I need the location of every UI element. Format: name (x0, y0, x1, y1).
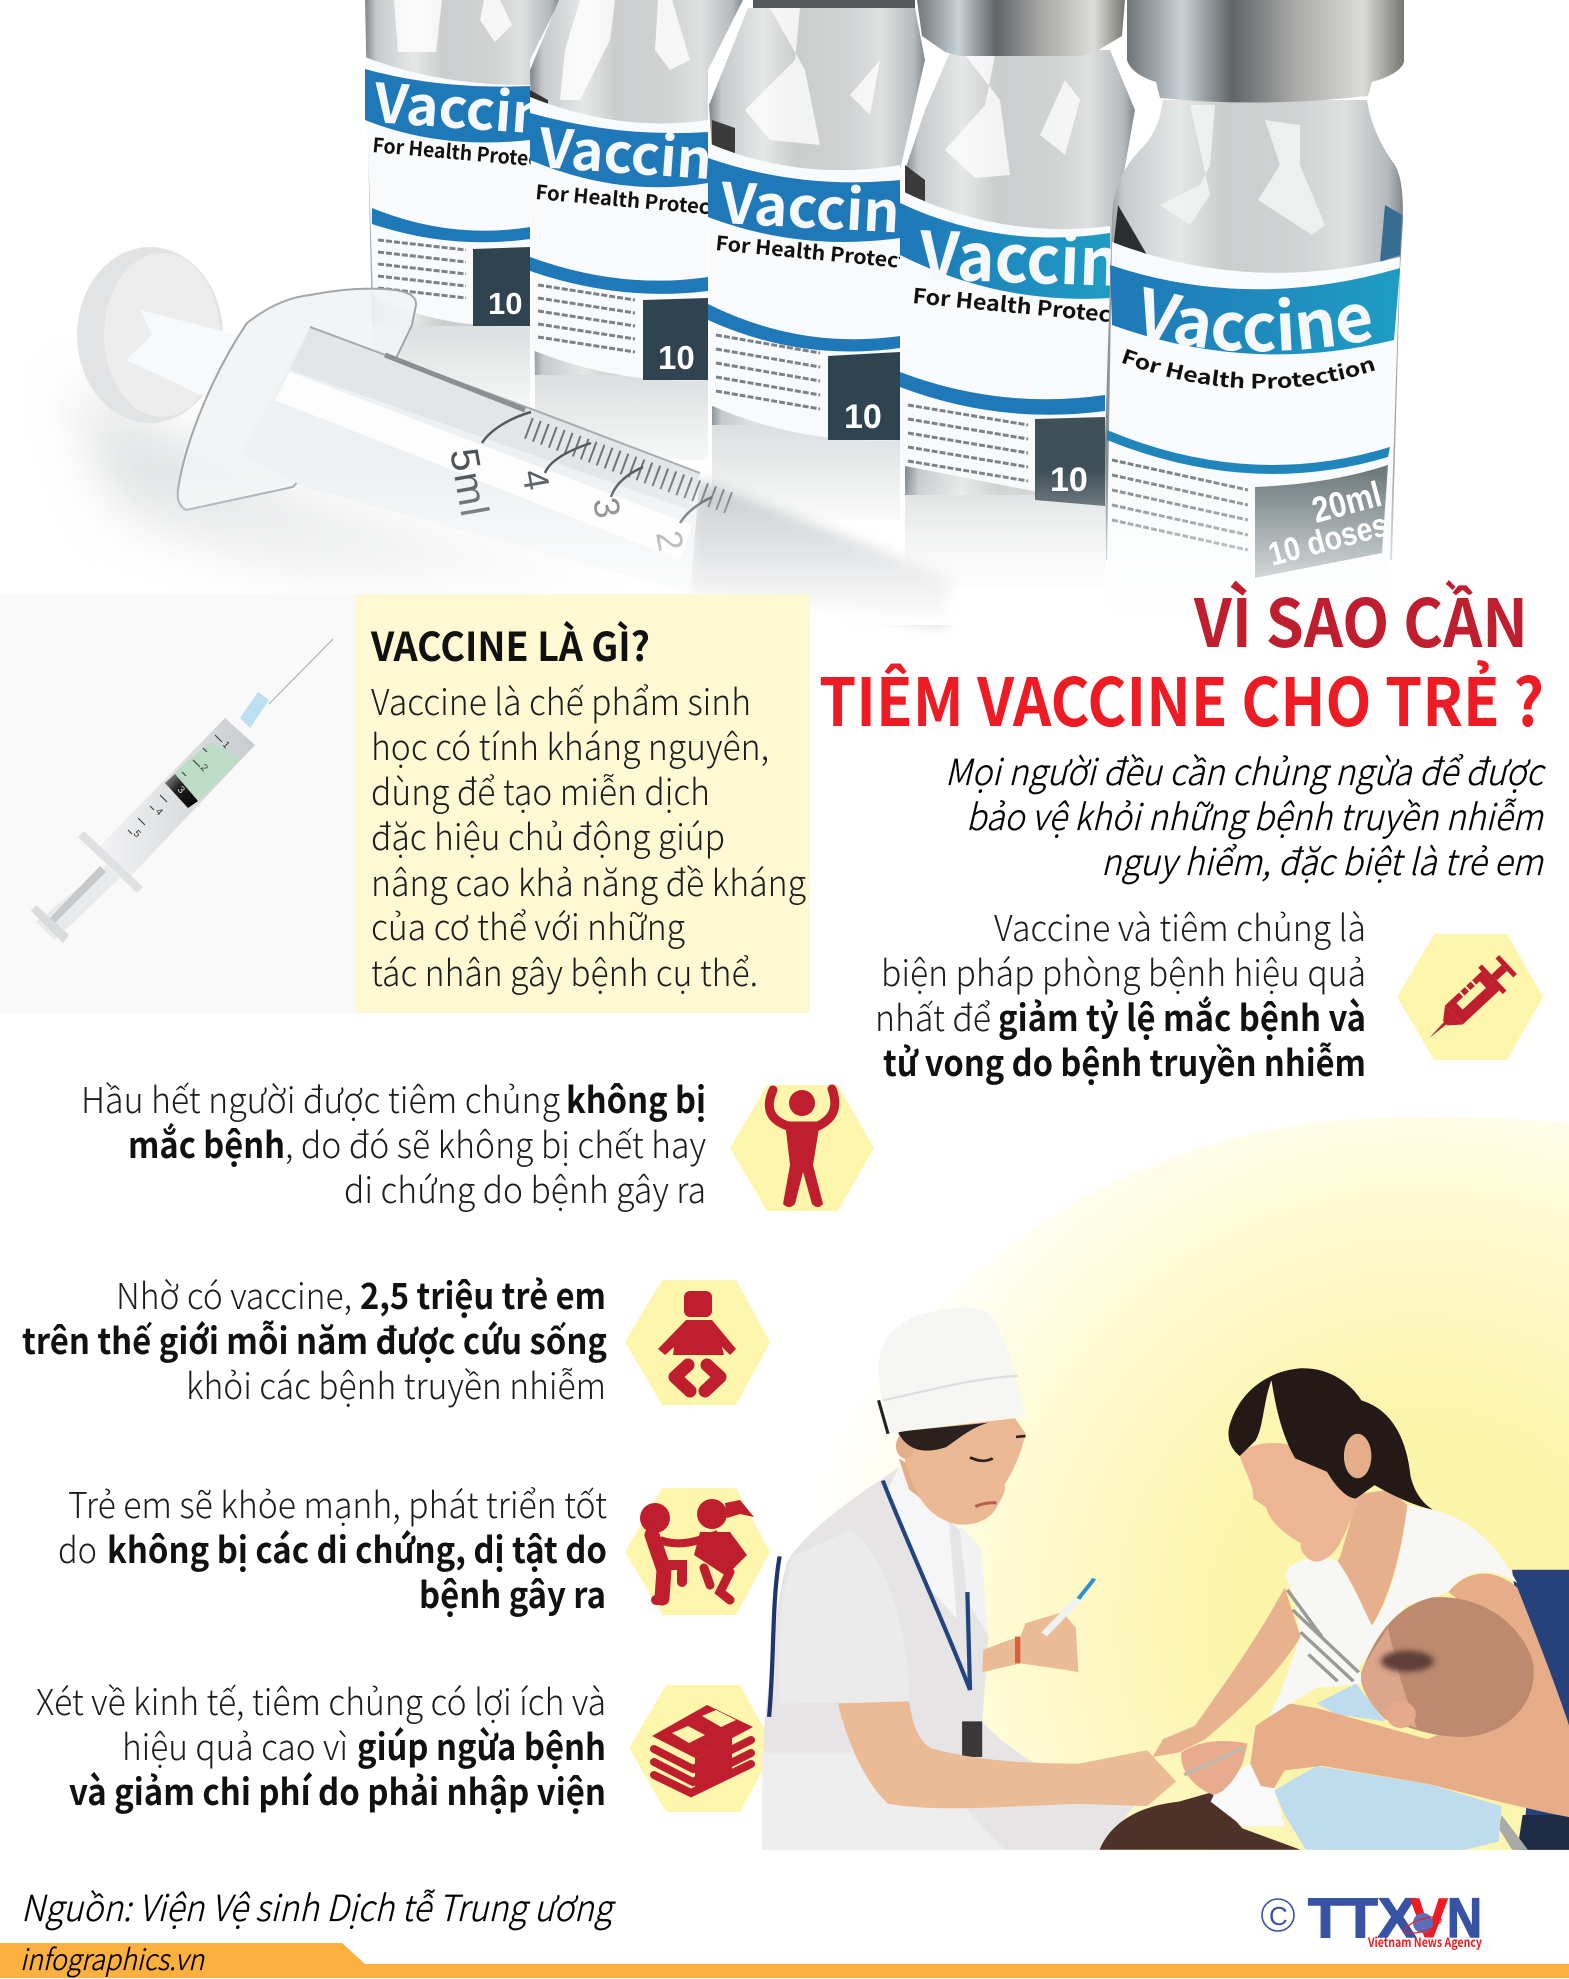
icon: medical syringe: 2 (198, 762, 210, 774)
title: VÌ SAO CẦN (1193, 571, 1528, 667)
vial 2: Vaccine (536, 104, 747, 197)
text: vaccine is an effective measure: biện pháp phòng bệnh hiệu quả (881, 945, 1366, 997)
subtitle: Mọi người đều cần chủng ngừa để được (945, 744, 1546, 796)
text: 2.5 million children saved: Nhờ có vaccine, (116, 1268, 352, 1320)
subtitle: nguy hiểm, đặc biệt là trẻ em (1101, 834, 1544, 886)
text: most vaccinated people do not get sick: di chứng do bệnh gây ra (344, 1162, 706, 1214)
vial 3: Vaccine (718, 159, 935, 251)
logo: TTXVN (1262, 1886, 1482, 1951)
large syringe: 5ml (441, 445, 496, 520)
text: economic benefit: hiệu quả cao vì (122, 1719, 348, 1771)
text: most vaccinated people do not get sick: mắc bệnh (128, 1117, 285, 1169)
syringe shadow (70, 380, 620, 600)
panel: what is a vaccine (356, 594, 810, 1013)
logo: TTXVN: N (1447, 1886, 1482, 1949)
large syringe: 3 (585, 494, 629, 521)
photo: nurse vaccinating a baby held by mother (762, 1308, 1569, 1850)
text: vaccine definition: dùng để tạo miễn dịch (371, 764, 710, 816)
text: vaccine definition: của cơ thể với những (371, 899, 685, 951)
vial 2: 10 (658, 339, 695, 376)
text: vaccine is an effective measure: giảm tỷ lệ mắc bệnh và (998, 990, 1366, 1042)
hero photo: vaccine vials and syringe (74, 0, 1404, 630)
logo: TTXVN: V (1410, 1886, 1448, 1949)
vial 4: For Health Protection (911, 280, 1158, 333)
text: 2.5 million children saved (22, 1268, 607, 1410)
subtitle (945, 744, 1546, 886)
text: most vaccinated people do not get sick: Hầu hết người được tiêm chủng (81, 1072, 560, 1124)
text: 2.5 million children saved: khỏi các bệnh truyền nhiễm (186, 1358, 606, 1410)
vial 3: For Health Protection (714, 227, 942, 278)
text: vaccine definition: Vaccine là chế phẩm sinh (371, 674, 751, 726)
large syringe (77, 247, 950, 625)
text: economic benefit: và giảm chi phí do phải nhập viện (69, 1764, 606, 1816)
text: vaccine is an effective measure: nhất để (875, 990, 991, 1042)
text: vaccine definition (371, 674, 806, 997)
text: children grow up healthy: do (58, 1522, 97, 1574)
vial 5: 20ml (1307, 473, 1386, 531)
icon: medical syringe (31, 639, 333, 943)
icon: medical syringe: 5 (131, 828, 143, 840)
dark trousers (1100, 1793, 1301, 1850)
vial 4: Vaccine (917, 203, 1160, 307)
icon: money stack hexagon (629, 1685, 775, 1812)
text: vaccine is an effective measure (875, 900, 1366, 1087)
mother arm holding baby (1250, 1574, 1569, 1817)
text: vaccine is an effective measure: tử vong do bệnh truyền nhiễm (883, 1035, 1366, 1087)
baby head (1361, 1597, 1534, 1737)
text: most vaccinated people do not get sick: không bị (566, 1072, 706, 1124)
baby body (1181, 1683, 1501, 1850)
icon: healthy person hexagon (730, 1085, 874, 1211)
heading: vaccine la gi: VACCINE LÀ GÌ? (370, 615, 650, 673)
text: vaccine definition: học có tính kháng nguyên, (371, 719, 769, 771)
source: Nguồn: Viện Vệ sinh Dịch tễ Trung ương (21, 1880, 616, 1932)
vial 3: 10 (844, 398, 882, 436)
title (819, 571, 1544, 746)
text: vaccine is an effective measure: Vaccine và tiêm chủng là (994, 900, 1366, 952)
footer band (0, 1937, 1569, 1979)
icon: children hexagon (625, 1488, 770, 1615)
vial 5: 10 doses (1264, 505, 1392, 573)
text: children grow up healthy: bệnh gây ra (419, 1567, 606, 1619)
mother (1152, 1368, 1528, 1850)
text: children grow up healthy: không bị các di chứng, dị tật do (107, 1522, 607, 1574)
nurse (762, 1308, 1176, 1850)
icon: medical syringe: 1 (220, 739, 232, 751)
vial 4: 10 (1050, 461, 1088, 499)
vial 5 (1105, 0, 1404, 578)
vial 2: For Health Protection (534, 176, 751, 224)
logo: TTXVN: TTX (1308, 1886, 1416, 1949)
icon: medical syringe: 4 (153, 806, 165, 818)
logo: TTXVN: C (1269, 1901, 1288, 1931)
text: economic benefit (36, 1674, 606, 1816)
vial 5: Vaccine (1144, 286, 1372, 352)
chair (1512, 1570, 1569, 1850)
vial 1: Vaccine (371, 59, 582, 152)
large syringe: 2 (648, 527, 692, 554)
large syringe: 4 (514, 466, 558, 493)
vial 3 (708, 0, 942, 520)
logo: TTXVN: Vietnam News Agency (1367, 1932, 1482, 1951)
vial 1: 10 (488, 286, 522, 321)
icon: baby hexagon (625, 1280, 770, 1405)
icon: syringe hexagon (1397, 934, 1543, 1060)
icon: medical syringe: 3 (175, 784, 187, 796)
vial 5: For Health Protection (1122, 348, 1375, 389)
subtitle: bảo vệ khỏi những bệnh truyền nhiễm (966, 789, 1544, 841)
text: vaccine definition: đặc hiệu chủ động giúp (371, 809, 725, 861)
footer site label: infographics.vn (20, 1937, 205, 1979)
yellow gradient background with photo (699, 1117, 1569, 1850)
text: economic benefit: giúp ngừa bệnh (357, 1719, 606, 1771)
panel: syringe illustration (0, 594, 357, 1013)
vial 1: For Health Protection (371, 129, 578, 176)
text: children grow up healthy (58, 1477, 607, 1619)
text: most vaccinated people do not get sick: , do đó sẽ không bị chết hay (285, 1117, 706, 1169)
text: vaccine definition: tác nhân gây bệnh cụ thể. (371, 945, 758, 997)
vial 1 (365, 0, 582, 410)
text: 2.5 million children saved: trên thế giới mỗi năm được cứu sống (22, 1313, 607, 1365)
text: children grow up healthy: Trẻ em sẽ khỏe mạnh, phát triển tốt (68, 1477, 607, 1529)
text: 2.5 million children saved: 2,5 triệu trẻ em (360, 1268, 606, 1320)
text: vaccine definition: nâng cao khả năng đề kháng (371, 855, 806, 907)
vial 4 (900, 0, 1160, 590)
text: economic benefit: Xét về kinh tế, tiêm chủng có lợi ích và (36, 1674, 606, 1726)
text: most vaccinated people do not get sick (81, 1072, 706, 1214)
vial 2 (530, 0, 751, 460)
